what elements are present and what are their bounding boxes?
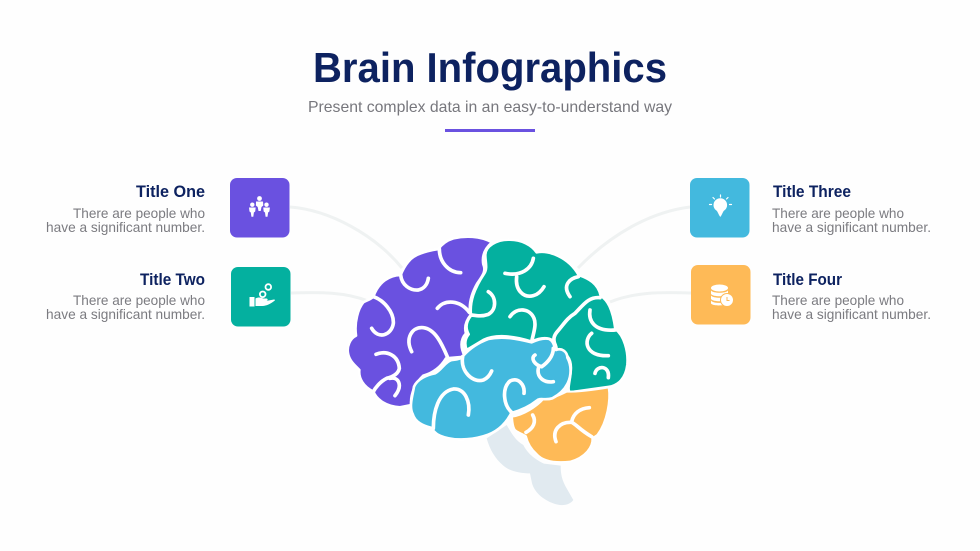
brain stem <box>487 425 573 505</box>
text block: have a significant number. <box>772 306 931 322</box>
text block: have a significant number. <box>46 219 205 235</box>
text block: have a significant number. <box>772 219 931 235</box>
heading: Title Four <box>773 270 842 289</box>
text block: have a significant number. <box>46 306 205 322</box>
occipital lobe: orange <box>512 387 609 462</box>
text block <box>772 292 931 322</box>
heading: Title One <box>136 182 205 201</box>
text block: There are people who <box>73 205 205 221</box>
temporal lobe: blue <box>411 338 571 440</box>
title underline <box>445 129 535 132</box>
panel: title three <box>690 178 931 238</box>
connector lines <box>290 207 691 302</box>
text block: There are people who <box>73 292 205 308</box>
brain illustration <box>348 237 628 505</box>
icon tile: coins in hand <box>231 267 290 326</box>
subtitle: Present complex data in an easy-to-understand way <box>308 99 672 116</box>
icon tile: people <box>230 178 290 238</box>
panel: title two <box>46 267 290 326</box>
panel: title four <box>691 265 931 324</box>
text block: There are people who <box>772 292 904 308</box>
text block <box>46 292 205 322</box>
parietal lobe: teal <box>465 240 628 392</box>
heading: Title Three <box>773 182 851 201</box>
frontal lobe: purple <box>348 237 492 407</box>
panel: title one <box>46 178 290 238</box>
icon tile: database with clock <box>691 265 750 324</box>
text block <box>46 205 205 235</box>
heading: Title Two <box>140 270 205 289</box>
icon tile: light bulb <box>690 178 750 238</box>
text block <box>772 205 931 235</box>
title: Brain Infographics <box>313 44 667 91</box>
text block: There are people who <box>772 205 904 221</box>
